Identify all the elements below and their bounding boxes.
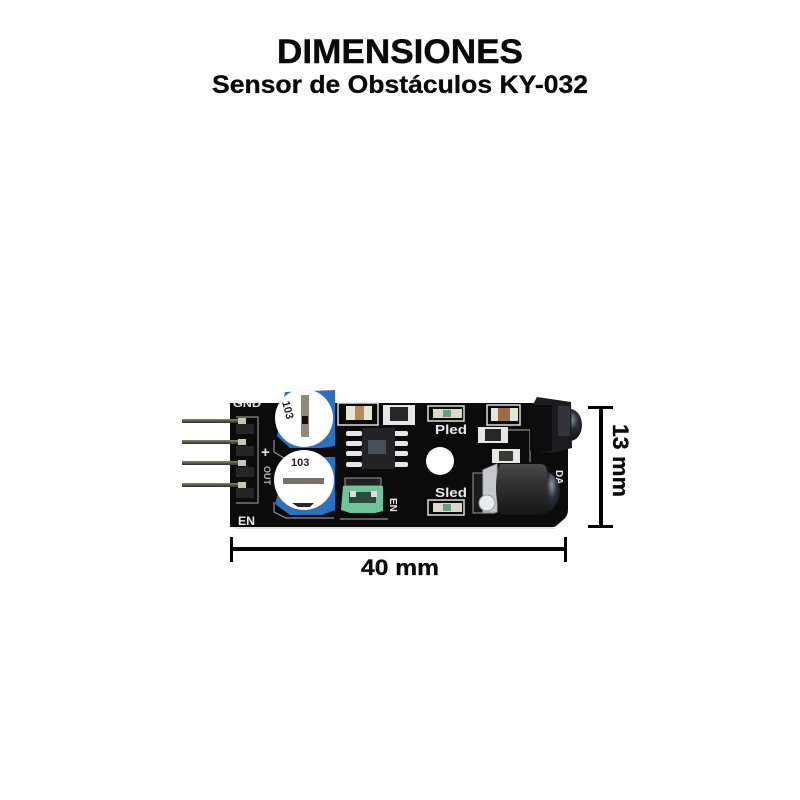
trimmer potentiometer top	[275, 389, 335, 448]
board labels	[233, 399, 564, 528]
board labels: +	[261, 444, 270, 461]
dimension bracket: width	[230, 537, 567, 562]
IR emitter LED	[473, 464, 560, 516]
dimension bracket: height	[588, 406, 613, 528]
board labels: GND	[233, 399, 261, 410]
circuit board	[230, 403, 568, 527]
header pins	[182, 418, 254, 498]
trimmer potentiometer bottom: 103	[291, 457, 309, 469]
trimmer potentiometer top: 103	[279, 400, 295, 421]
SMD components	[338, 403, 520, 515]
trimmer potentiometer bottom	[274, 450, 335, 515]
board silkscreen	[236, 417, 530, 519]
dimension label: 40 mm: 40 mm	[361, 555, 439, 580]
title: DIMENSIONES	[277, 33, 523, 71]
sensor module illustration	[182, 389, 582, 529]
board labels: EN	[387, 498, 398, 512]
board labels: Pled	[435, 422, 467, 437]
mounting hole	[426, 447, 454, 475]
board labels: Sled	[435, 485, 467, 500]
subtitle: Sensor de Obstáculos KY-032	[212, 71, 588, 99]
green jumper	[341, 478, 383, 513]
IR receiver	[530, 397, 582, 453]
board labels: EN	[238, 514, 255, 528]
comparator IC chip	[346, 428, 408, 469]
board labels: OUT	[262, 466, 272, 486]
board labels: DA	[553, 470, 564, 484]
dimension label: 13 mm: 13 mm	[608, 424, 633, 497]
